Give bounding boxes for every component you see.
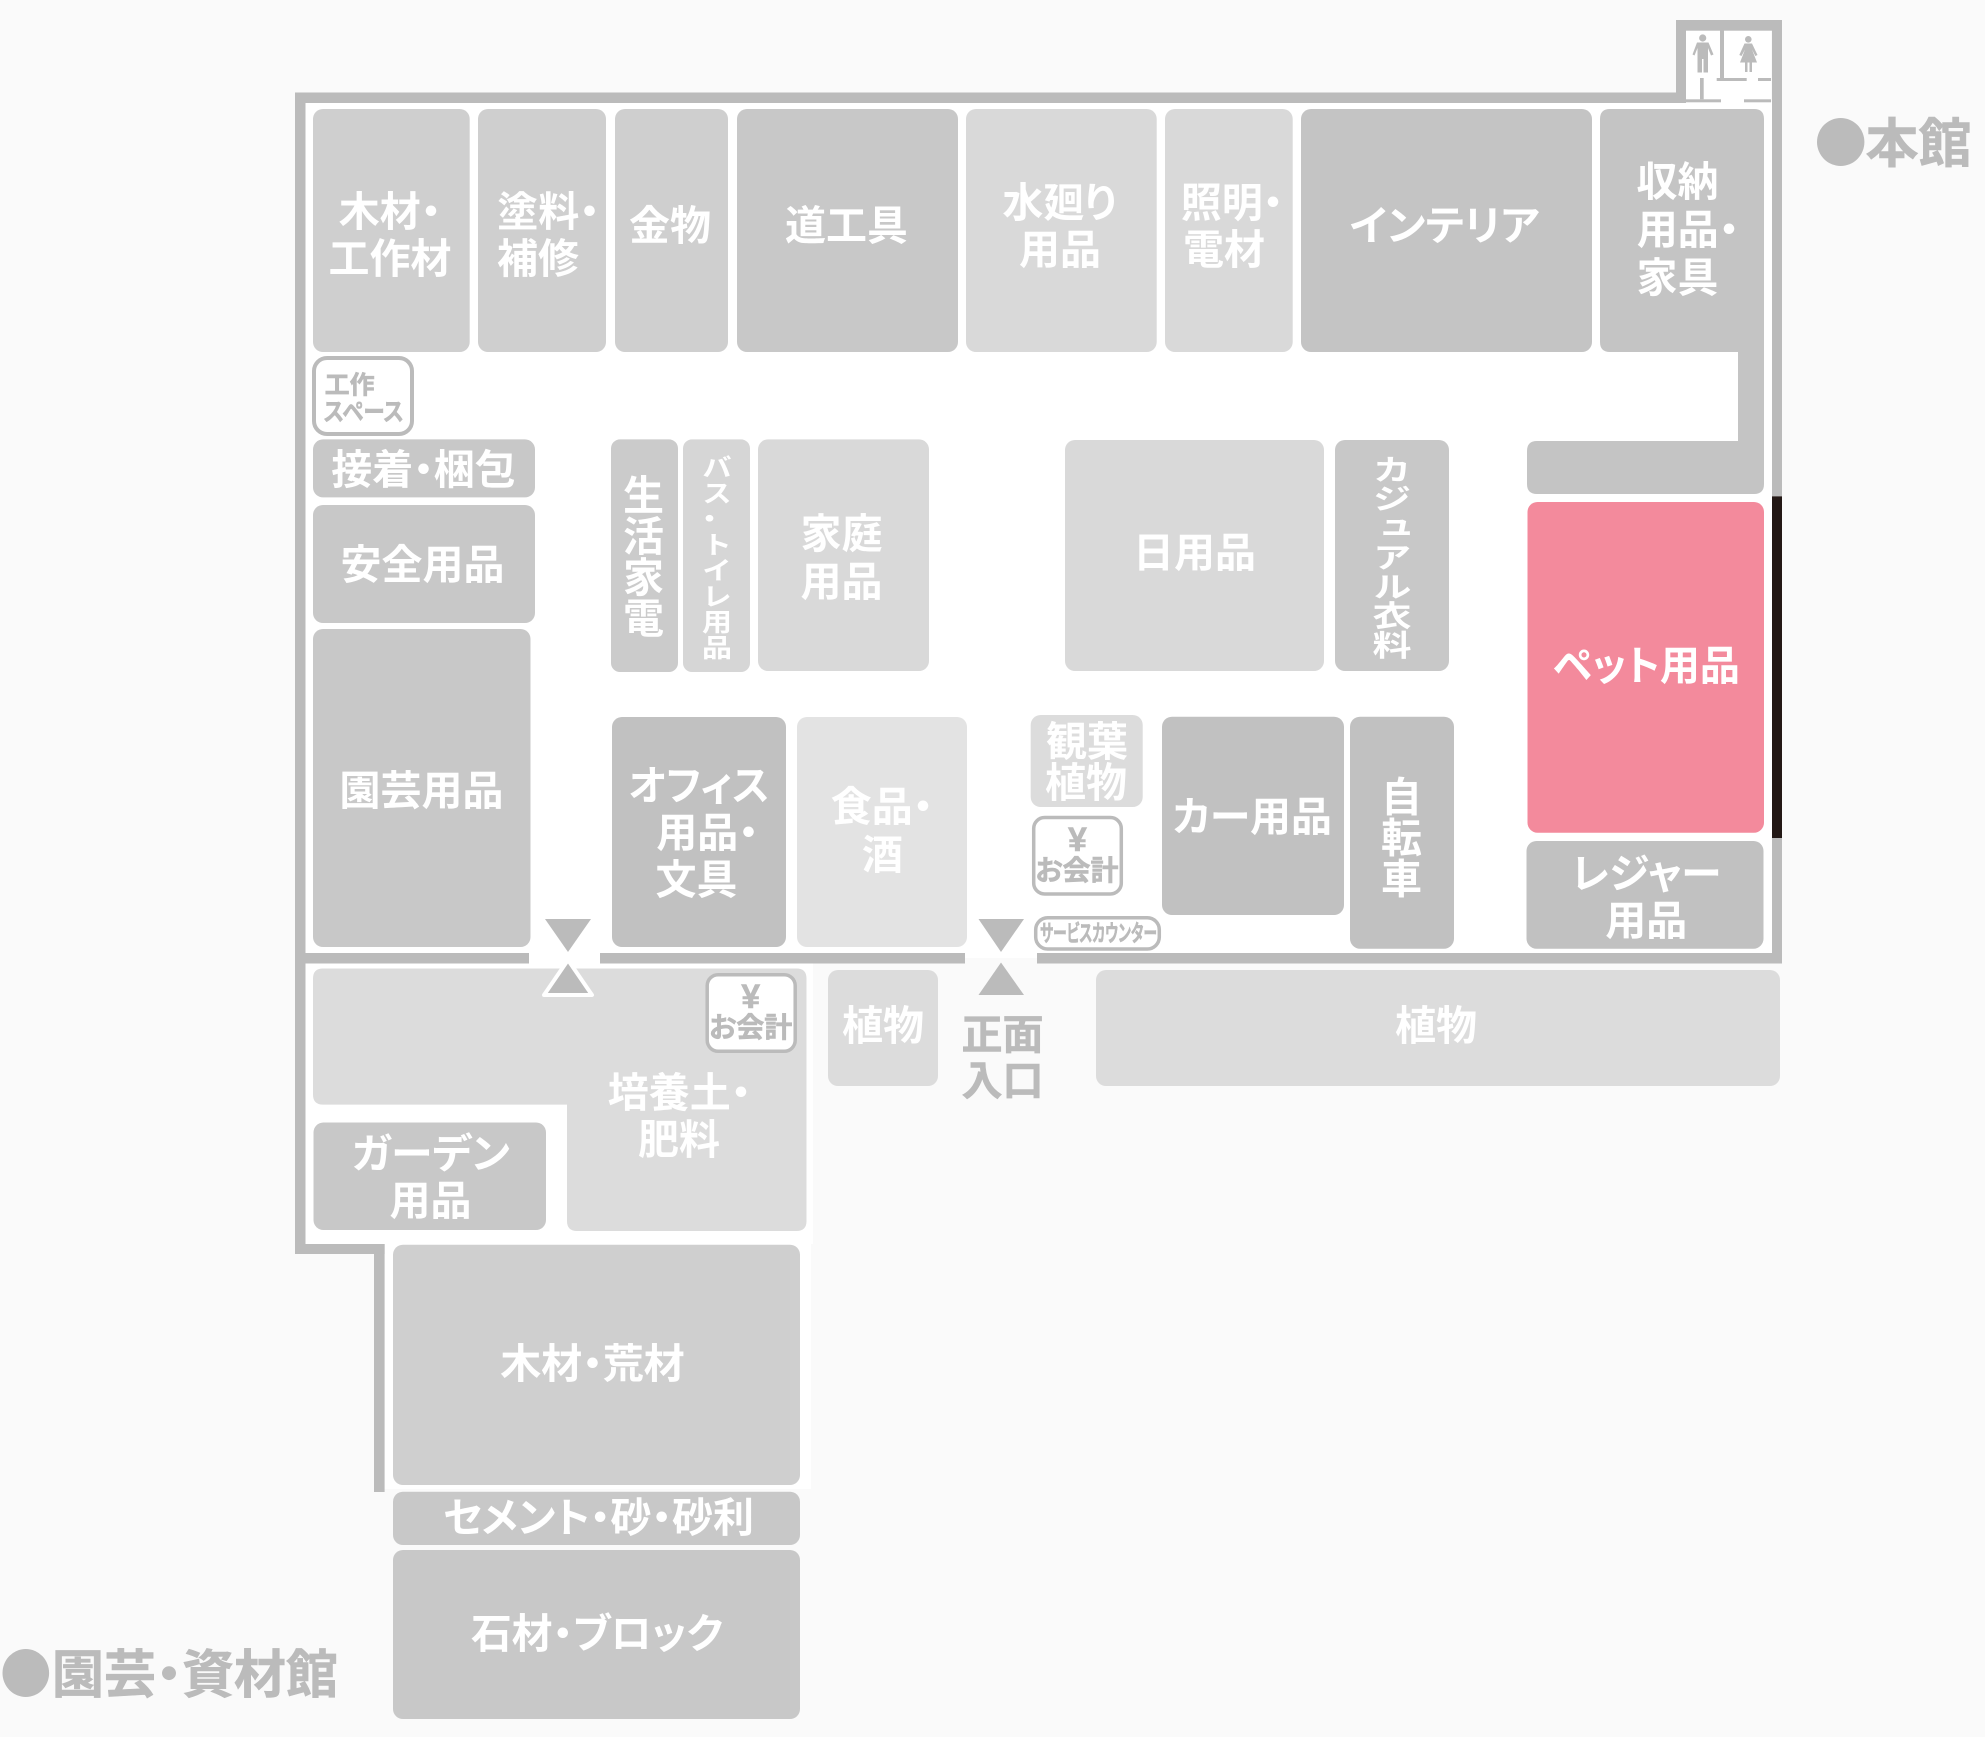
panel: 家庭用品: 用品 [800,559,882,605]
icon: man [1692,34,1714,72]
panel: カー用品 [1162,717,1344,915]
arrow: garden entrance up [544,960,592,995]
panel: セメント・砂・砂利: セメント・砂・砂利 [443,1495,754,1541]
label: お会計 (garden): お会計 [709,1012,792,1043]
panel: 塗料・補修: 補修 [497,236,579,282]
panel: カジュアル衣料 [1335,440,1449,671]
label: 正面入口 [962,1012,1044,1104]
label: お会計 (garden) [707,975,795,1051]
panel: セメント・砂・砂利 [393,1492,800,1545]
panel: 生活家電: 生活家電 [616,474,663,638]
panel: 自転車: 自転車 [1374,776,1421,899]
label: 工作スペース: 工作 [325,372,375,400]
label: サービスカウンター [1036,918,1159,949]
panel: インテリア: インテリア [1350,203,1540,249]
panel: 石材・ブロック: 石材・ブロック [471,1611,723,1657]
panel: 金物: 金物 [629,203,711,249]
panel: 自転車 [1350,717,1454,949]
panel: 照明・電材: 電材 [1183,227,1265,273]
label: 工作スペース: スペース [324,398,404,426]
panel: 園芸用品 [313,629,530,947]
panel: 植物 (long) [1096,970,1780,1086]
panel: ガーデン用品: 用品 [390,1178,472,1224]
arrow: main entrance up [978,962,1024,995]
legend: 園芸・資材館: 園芸・資材館 [52,1647,338,1705]
panel: 安全用品: 安全用品 [340,542,504,588]
panel: 生活家電 [611,439,678,672]
panel: 金物 [615,109,728,352]
panel: 食品・酒 [797,717,967,947]
panel: 培養土・肥料: 培養土・ [608,1070,751,1116]
label: お会計 (main building): お会計 [1035,855,1119,886]
panel: ガーデン用品 [314,1122,546,1230]
panel: 園芸用品: 園芸用品 [340,768,504,814]
panel: オフィス用品・文具: 用品・ [656,810,759,856]
icon: woman [1739,36,1758,72]
arrow: main entrance down [978,919,1024,952]
legend: 本館 [1817,115,1972,174]
panel: 道工具 [737,109,958,352]
label: 正面入口: 正面 [962,1012,1044,1058]
panel: 日用品 [1065,440,1324,671]
panel: 塗料・補修: 塗料・ [497,189,600,235]
panel: 木材・工作材: 木材・ [339,189,441,235]
label: お会計 (main building): ¥ [1068,821,1087,859]
dark wall segment beside pet section [1772,496,1782,838]
panel: インテリア [1301,109,1592,352]
panel: 木材・工作材 [313,109,470,352]
building walls [295,20,1782,1492]
panel: オフィス用品・文具 [612,717,786,947]
panel: 日用品: 日用品 [1133,530,1256,576]
panel: レジャー用品: レジャー [1571,851,1721,897]
arrow: garden entrance down [545,919,591,952]
panel: 収納用品・家具: 収納 [1636,159,1718,205]
panel: 培養土・肥料 [313,968,806,1231]
panel: 植物 (long): 植物 [1395,1003,1477,1049]
panel: 観葉植物: 植物 [1045,760,1127,806]
panel: 木材・工作材: 工作材 [328,236,452,282]
panel: バス・トイレ用品 [683,439,750,672]
panel: ペット用品 (highlighted) [1528,502,1764,833]
panel: 収納用品・家具: 家具 [1636,255,1718,301]
panel: 水廻り用品: 水廻り [1002,180,1117,226]
panel: オフィス用品・文具: 文具 [656,857,738,903]
panel: 照明・電材: 照明・ [1181,180,1283,226]
panel: 道工具: 道工具 [785,203,908,249]
panel: オフィス用品・文具: オフィス [628,763,770,809]
panel: 水廻り用品 [966,109,1157,352]
panel: 食品・酒: 酒 [862,832,903,878]
panel: 培養土・肥料: 肥料 [638,1117,720,1163]
panel: バス・トイレ用品: バス・トイレ用品 [697,454,732,660]
panel: レジャー用品: 用品 [1605,898,1687,944]
panel: 食品・酒: 食品・ [831,784,933,830]
panel: 観葉植物 [1031,715,1143,807]
label: 工作スペース [314,358,412,434]
label: お会計 (garden): ¥ [741,978,760,1016]
panel: 植物 (small): 植物 [842,1003,924,1049]
panel: 塗料・補修 [478,109,606,352]
panel: 観葉植物: 観葉 [1046,719,1128,765]
panel: 家庭用品 [758,439,929,671]
panel: 安全用品 [313,505,535,623]
panel: 接着・梱包: 接着・梱包 [331,447,516,493]
panel: 木材・荒材: 木材・荒材 [500,1341,685,1387]
panel: 水廻り用品: 用品 [1019,227,1101,273]
panel: カジュアル衣料: カジュアル衣料 [1367,454,1412,660]
panel: ペット用品 (highlighted): ペット用品 [1553,643,1740,689]
legend: 本館: 本館 [1866,115,1972,174]
label: サービスカウンター: サービスカウンター [1040,920,1157,946]
panel: 収納用品・家具 [1527,109,1764,494]
panel: カー用品: カー用品 [1173,794,1332,840]
panel: レジャー用品 [1526,841,1764,949]
panel: 木材・荒材 [393,1245,800,1485]
panel: 接着・梱包 [313,439,535,497]
restrooms [1686,30,1771,102]
panel: 収納用品・家具: 用品・ [1637,207,1739,253]
label: お会計 (main building) [1034,818,1121,894]
label: 正面入口: 入口 [962,1058,1044,1104]
panel: 家庭用品: 家庭 [800,511,882,557]
panel: 照明・電材 [1165,109,1293,352]
panel: 植物 (small) [828,970,938,1086]
panel: 石材・ブロック [393,1550,800,1719]
panel: ガーデン用品: ガーデン [352,1131,510,1177]
